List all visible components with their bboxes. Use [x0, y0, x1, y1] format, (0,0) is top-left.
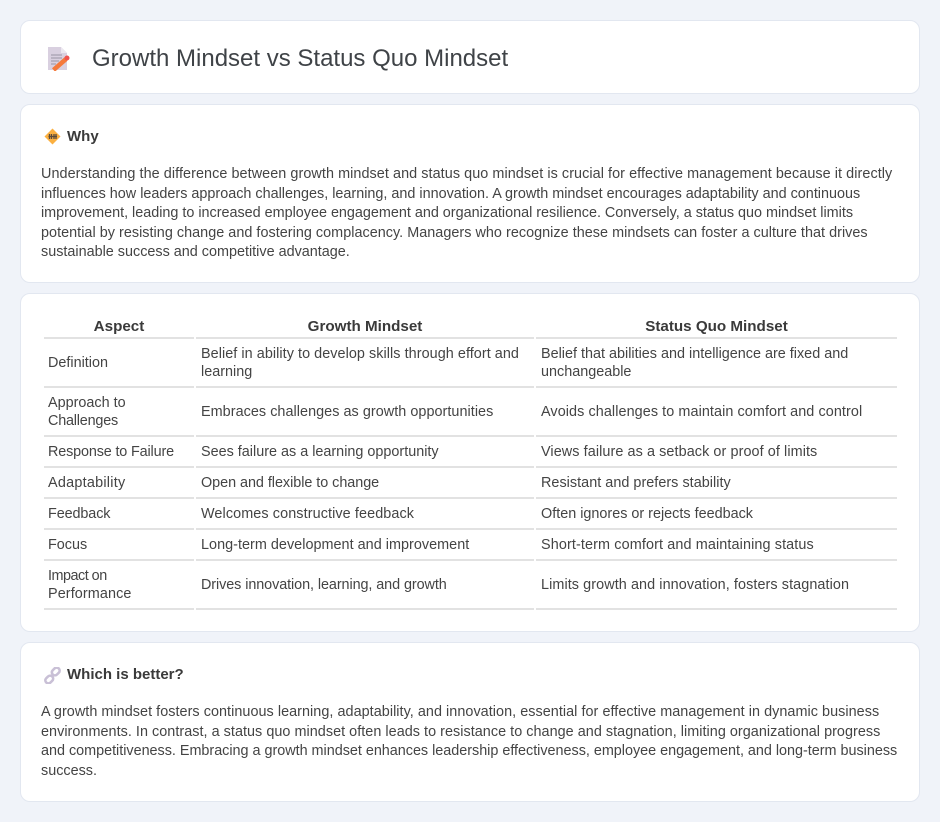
icon: chain link — [44, 667, 61, 684]
text: which is better paragraph: environments. In contrast, a status quo mindset often leads to resistance to change and stagnation, limiting organizational progress — [41, 724, 880, 740]
row: feedback: Often ignores or rejects feedback — [541, 506, 753, 522]
row: definition: Definition — [48, 355, 108, 371]
row: impact on performance: Performance — [48, 586, 131, 602]
row: approach to challenges: Approach to — [48, 395, 126, 411]
row: impact on performance: Limits growth and innovation, fosters stagnation — [541, 577, 849, 593]
column header: growth mindset: Growth Mindset — [308, 318, 422, 335]
icon: warning diamond — [44, 128, 60, 144]
row: impact on performance: Impact on — [48, 568, 107, 584]
heading: why: Why — [67, 128, 99, 145]
row: definition: Belief in ability to develop skills through effort and — [201, 346, 519, 362]
row: feedback — [48, 506, 753, 522]
row: approach to challenges: Avoids challenges to maintain comfort and control — [541, 404, 862, 420]
column header: aspect: Aspect — [94, 318, 144, 335]
panel: title — [20, 20, 920, 94]
row: feedback: Welcomes constructive feedback — [201, 506, 414, 522]
heading: which is better: Which is better? — [67, 666, 184, 683]
row: response to failure: Sees failure as a learning opportunity — [201, 444, 439, 460]
heading: page title: Growth Mindset vs Status Quo Mindset — [92, 45, 508, 72]
row: approach to challenges: Challenges — [48, 413, 118, 429]
row: focus — [48, 537, 814, 553]
text: which is better paragraph: A growth mindset fosters continuous learning, adaptability, and innovation, essential for effective management in dynamic business — [41, 704, 879, 720]
text: which is better paragraph: success. — [41, 762, 97, 778]
row: adaptability: Open and flexible to change — [201, 475, 379, 491]
row: definition: unchangeable — [541, 364, 631, 380]
panel: comparison table — [20, 293, 920, 632]
row: response to failure — [48, 444, 817, 460]
panel: which is better — [20, 642, 920, 802]
row: focus: Long-term development and improvement — [201, 537, 469, 553]
text: why paragraph: sustainable success and competitive advantage. — [41, 244, 350, 260]
icon: document with pencil — [48, 47, 70, 71]
row: approach to challenges: Embraces challenges as growth opportunities — [201, 404, 493, 420]
column header: status quo mindset: Status Quo Mindset — [645, 318, 788, 335]
text: why paragraph: improvement, leading to increased employee engagement and organizational resilience. Conversely, a status quo mindset limits — [41, 205, 853, 221]
table: comparison — [44, 318, 897, 610]
row: impact on performance — [48, 568, 849, 602]
row: feedback: Feedback — [48, 506, 110, 522]
row: adaptability — [48, 475, 731, 491]
row: adaptability: Adaptability — [48, 475, 125, 491]
row: definition: learning — [201, 364, 252, 380]
row: approach to challenges — [48, 395, 862, 429]
text: which is better paragraph — [41, 704, 897, 778]
row: definition — [48, 346, 848, 380]
text: why paragraph: potential by resisting change and fostering complacency. Managers who recognize these mindsets can foster a culture that drives — [41, 224, 868, 240]
row: focus: Short-term comfort and maintaining status — [541, 537, 814, 553]
row: impact on performance: Drives innovation, learning, and growth — [201, 577, 447, 593]
text: why paragraph: influences how leaders approach challenges, learning, and innovation. A growth mindset encourages adaptability and continuous — [41, 186, 860, 202]
row: focus: Focus — [48, 537, 87, 553]
row: definition: Belief that abilities and intelligence are fixed and — [541, 346, 848, 362]
text: why paragraph — [41, 166, 892, 260]
row: response to failure: Response to Failure — [48, 444, 174, 460]
row: adaptability: Resistant and prefers stability — [541, 475, 731, 491]
text: why paragraph: Understanding the difference between growth mindset and status quo mindset is crucial for effective management because it directly — [41, 166, 892, 182]
row: response to failure: Views failure as a setback or proof of limits — [541, 444, 817, 460]
panel: why — [20, 104, 920, 283]
text: which is better paragraph: and competitiveness. Embracing a growth mindset enhances leadership effectiveness, employee engagement, and long-term business — [41, 743, 897, 759]
